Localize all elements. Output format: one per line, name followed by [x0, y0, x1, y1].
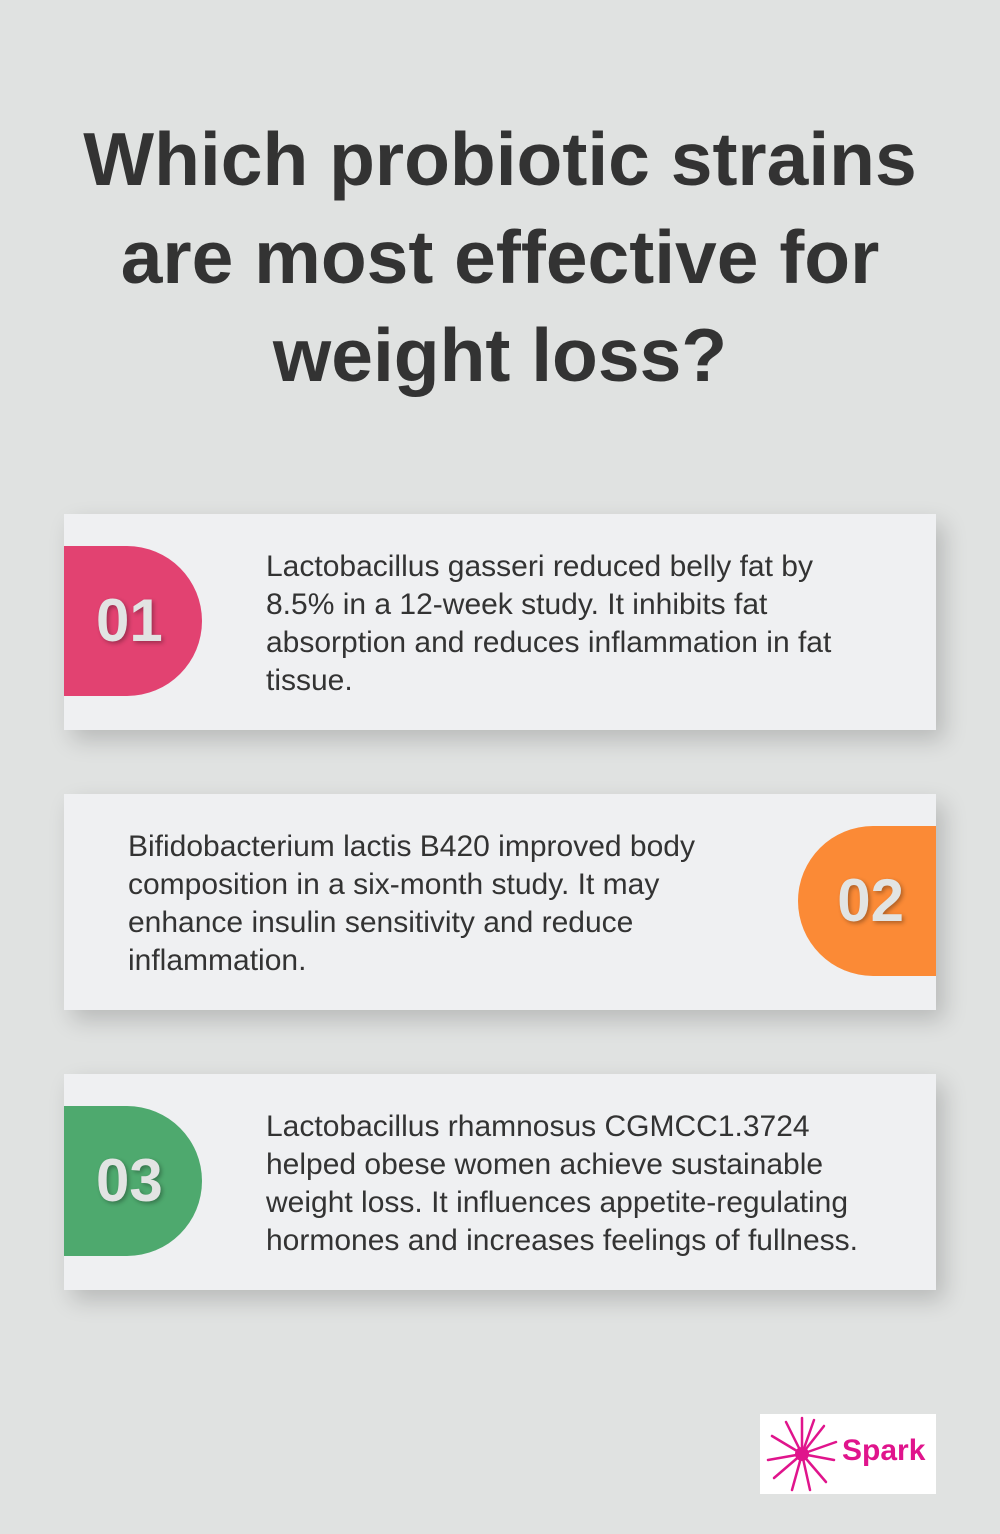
text 1 — [266, 550, 832, 697]
badge 03 — [64, 1106, 202, 1256]
text 2: Bifidobacterium lactis B420 improved body — [128, 830, 695, 863]
text 2 — [128, 830, 695, 977]
title: are most effective for — [121, 215, 879, 299]
title: Which probiotic strains — [83, 117, 917, 201]
text 3: helped obese women achieve sustainable — [266, 1148, 823, 1181]
logo text: Spark — [842, 1434, 925, 1467]
text 3: hormones and increases feelings of fullness. — [266, 1224, 858, 1257]
logo: Spark — [760, 1414, 936, 1494]
badge 03: 03 — [96, 1147, 163, 1214]
text 3: weight loss. It influences appetite-regulating — [266, 1186, 848, 1219]
badge 01 — [64, 546, 202, 696]
text 2: enhance insulin sensitivity and reduce — [128, 906, 633, 939]
text 2: composition in a six-month study. It may — [128, 868, 659, 901]
card 1 — [64, 514, 936, 730]
icon: starburst — [766, 1416, 838, 1492]
text 1: 8.5% in a 12-week study. It inhibits fat — [266, 588, 767, 621]
badge 02 — [798, 826, 936, 976]
card 3 — [64, 1074, 936, 1290]
badge 01: 01 — [96, 587, 163, 654]
title: weight loss? — [273, 313, 727, 397]
title — [83, 117, 917, 397]
badge 02: 02 — [837, 867, 904, 934]
text 3 — [266, 1110, 858, 1257]
text 1: tissue. — [266, 664, 353, 697]
card 2 — [64, 794, 936, 1010]
text 1: absorption and reduces inflammation in fat — [266, 626, 831, 659]
text 3: Lactobacillus rhamnosus CGMCC1.3724 — [266, 1110, 810, 1143]
text 1: Lactobacillus gasseri reduced belly fat by — [266, 550, 813, 583]
text 2: inflammation. — [128, 944, 306, 977]
